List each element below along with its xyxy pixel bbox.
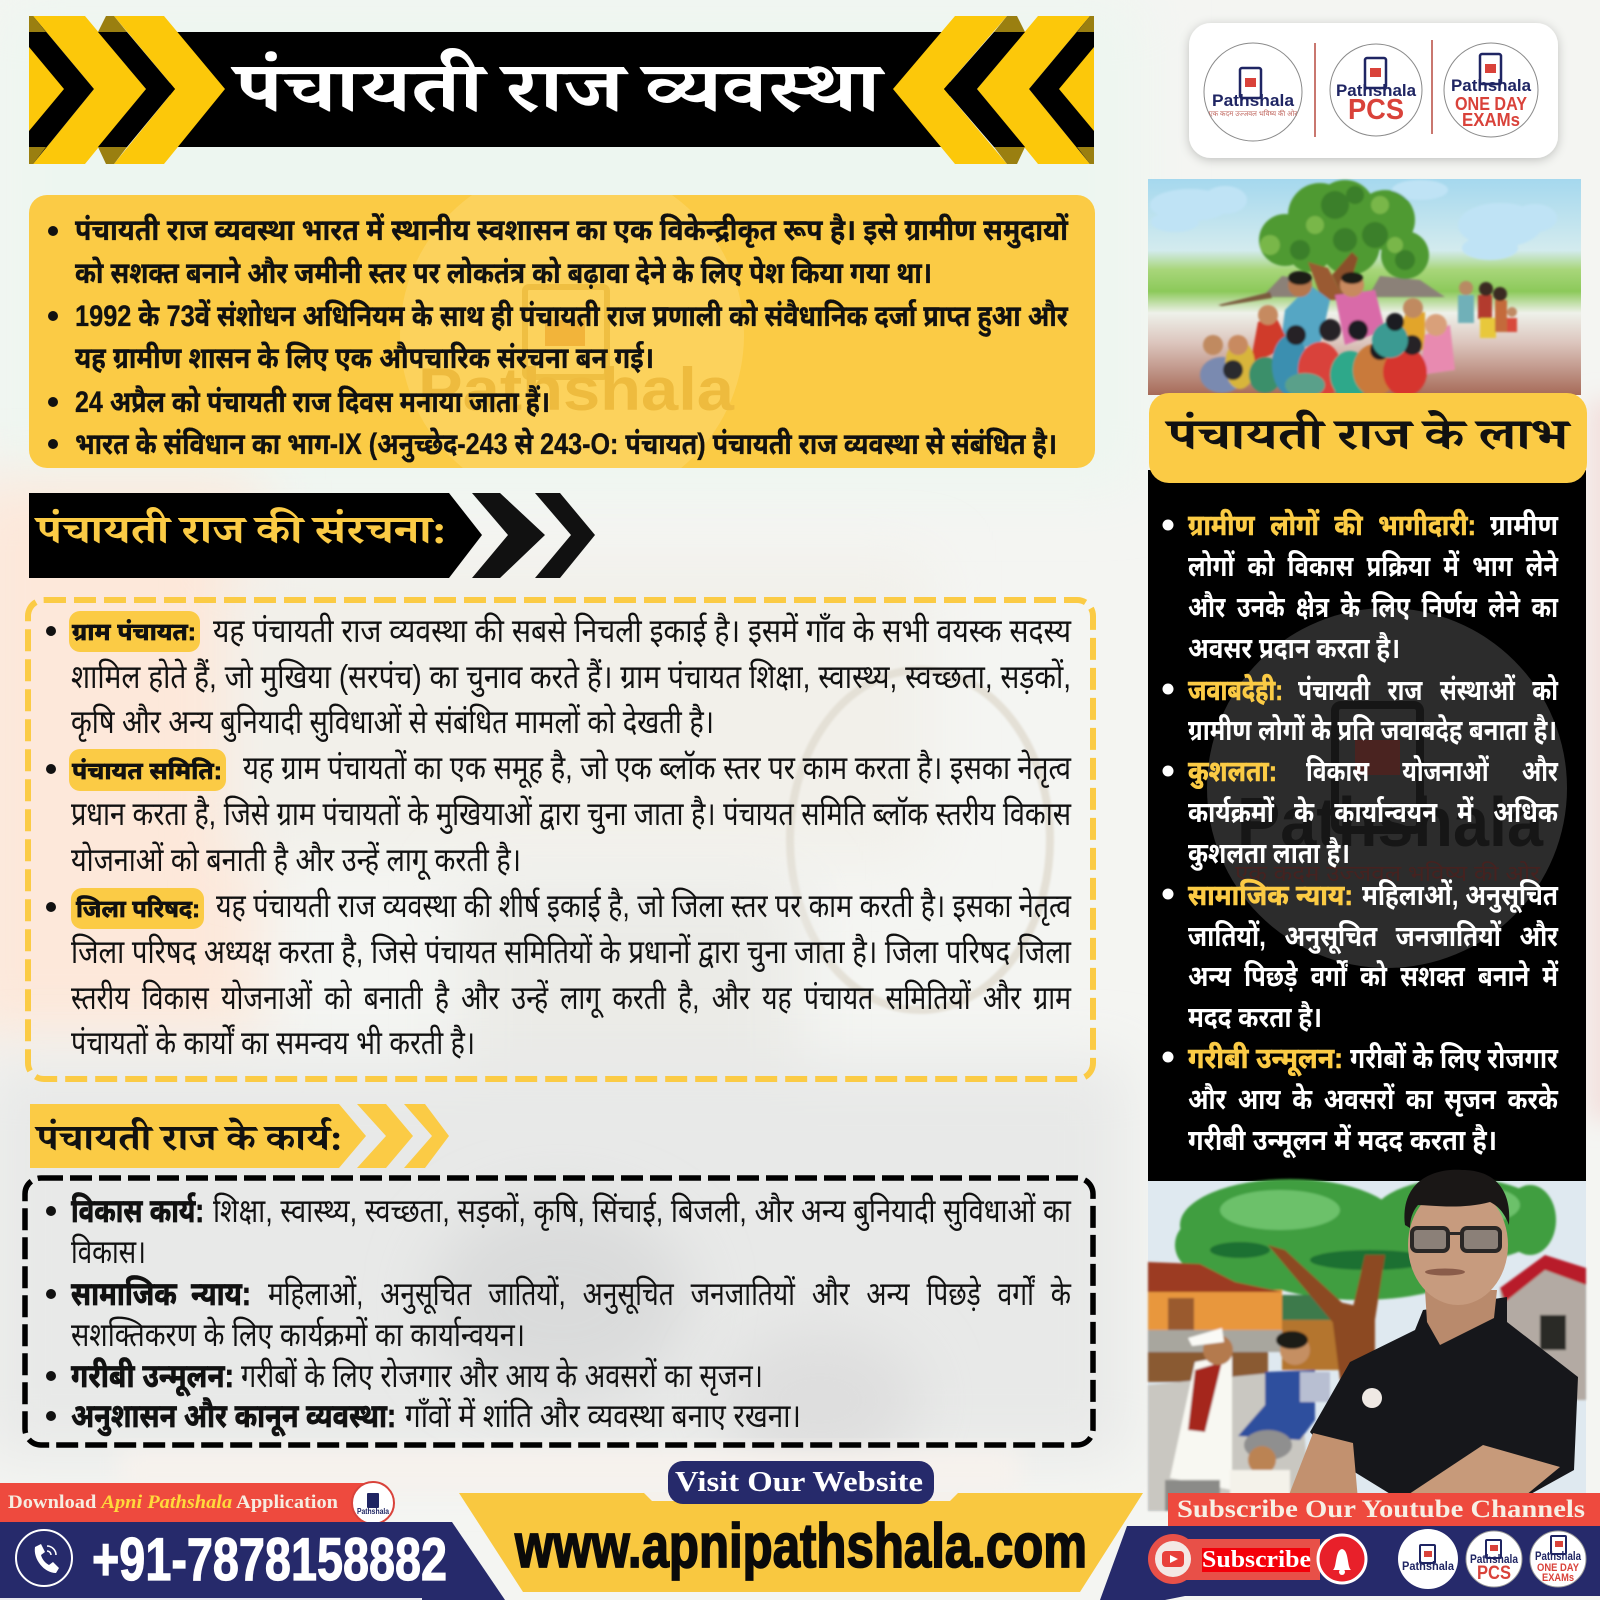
- presenter: [1287, 1170, 1578, 1500]
- chip: gram panchayat: ग्राम पंचायत:: [72, 619, 196, 646]
- benefits bullets: ग्रामीण लोगों की भागीदारी:: [1188, 509, 1476, 542]
- panel: structure: योजनाओं को बनाती है और उन्हें लागू करती है।: [71, 840, 521, 880]
- illustration: village scene with presenter: [1148, 1170, 1586, 1511]
- footer center: website: www.apnipathshala.com: [514, 1512, 1087, 1581]
- panel: structure: कृषि और अन्य बुनियादी सुविधाओं से संबंधित मामलों को देखती है।: [71, 702, 714, 742]
- benefits bullets: जवाबदेही:: [1188, 673, 1283, 707]
- woman in blue sari: [1238, 1331, 1330, 1440]
- website pill: [668, 1461, 934, 1504]
- panel: functions: गरीबी उन्मूलन:: [71, 1357, 234, 1397]
- intro bullets: पंचायती राज व्यवस्था भारत में स्थानीय स्वशासन का एक विकेन्द्रीकृत रूप है। इसे ग्रामीण समुदायों: [75, 212, 1069, 249]
- orange house: [1148, 1262, 1288, 1382]
- intro panel: [29, 195, 1095, 468]
- footer left: app download and phone: Download Apni Pathshala Application: [8, 1492, 338, 1513]
- watermark: [400, 195, 744, 468]
- benefits heading: पंचायती राज के लाभ: [1164, 408, 1571, 459]
- panel: benefits: [1148, 393, 1587, 1181]
- intro bullets: को सशक्त बनाने और जमीनी स्तर पर लोकतंत्र को बढ़ावा देने के लिए पेश किया गया था।: [75, 255, 932, 290]
- heading: structure: [29, 493, 595, 578]
- intro bullets: यह ग्रामीण शासन के लिए एक औपचारिक संरचना बन गई।: [75, 340, 654, 375]
- intro bullets: 1992 के 73वें संशोधन अधिनियम के साथ ही पंचायती राज प्रणाली को संवैधानिक दर्जा प्राप्त हुआ और: [75, 298, 1069, 337]
- panel: functions: गाँवों में शांति और व्यवस्था बनाए रखना।: [405, 1396, 801, 1434]
- panel: functions: शिक्षा, स्वास्थ्य, स्वच्छता, सड़कों, कृषि, सिंचाई, बिजली, और अन्य बुनियादी सुविधाओं का: [213, 1192, 1072, 1231]
- panel: functions: अनुशासन और कानून व्यवस्था:: [71, 1397, 396, 1437]
- logo: One Day Exams: EXAMs: [1462, 110, 1520, 130]
- tree: [1259, 180, 1429, 300]
- logo: PCS small: PCS: [1477, 1563, 1511, 1584]
- intro bullets: [48, 212, 1069, 463]
- ground: [1148, 1370, 1310, 1511]
- icon: phone: [16, 1530, 72, 1586]
- logo: One Day Exams: Pathshala: [1451, 76, 1532, 95]
- panel: structure: शामिल होते हैं, जो मुखिया (सरपंच) का चुनाव करते हैं। ग्राम पंचायत शिक्षा, स्वास्थ्य, स्वच्छता, सड़कों,: [71, 657, 1071, 697]
- watermark: Pathshala: [418, 356, 735, 423]
- logo: PCS: [1330, 44, 1422, 136]
- chip: panchayat samiti: [69, 749, 226, 791]
- heading: functions: [30, 1104, 449, 1168]
- panel: functions: [25, 1178, 1093, 1445]
- logo: PCS small: Pathshala: [1470, 1552, 1518, 1566]
- footer left: app download and phone: +91-7878158882: [92, 1526, 447, 1593]
- logo: small: Pathshala: [357, 1507, 389, 1516]
- clouds: [1150, 180, 1557, 260]
- panel: functions: सशक्तिकरण के लिए कार्यक्रमों का कार्यान्वयन।: [71, 1315, 525, 1353]
- logo: Apni Pathshala: एक कदम उज्जवल भविष्य की ओर: [1209, 109, 1297, 118]
- logo: Pathshala: Pathshala: [1402, 1559, 1454, 1573]
- subscribe button: Subscribe: [1202, 1547, 1311, 1573]
- panel: functions: विकास।: [71, 1233, 146, 1270]
- green wall: [1282, 1295, 1332, 1350]
- standing group: [1458, 281, 1517, 338]
- heading: structure: पंचायती राज की संरचना:: [34, 507, 447, 552]
- benefits bullets: मदद करता है।: [1188, 1001, 1322, 1034]
- logo: Apni Pathshala: Pathshala: [1212, 91, 1295, 110]
- panel: structure: यह ग्राम पंचायतों का एक समूह है, जो एक ब्लॉक स्तर पर काम करता है। इसका नेतृत्व: [243, 748, 1072, 788]
- watermark: एक कदम उज्जवल भविष्य की ओर: [1235, 861, 1541, 886]
- benefits bullets: कुशलता लाता है।: [1188, 837, 1350, 871]
- footer center: website: [459, 1461, 1143, 1592]
- logo: One Day Exams small: [1530, 1531, 1586, 1587]
- seated man: [1230, 1430, 1292, 1511]
- red roof house: [1500, 1255, 1586, 1400]
- benefits bullets: [1162, 509, 1559, 1158]
- chip: zila parishad: जिला परिषद:: [76, 895, 200, 923]
- footer right: youtube: [1100, 1493, 1600, 1600]
- right chevrons: [893, 16, 1094, 164]
- chip: zila parishad: [71, 888, 204, 929]
- title banner: [29, 16, 1094, 164]
- benefits bullets: अवसर प्रदान करता है।: [1188, 632, 1400, 665]
- watermark: [1207, 608, 1567, 968]
- huts: [1262, 276, 1445, 297]
- footer right: youtube: Subscribe Our Youtube Channels: [1177, 1496, 1585, 1523]
- logo: One Day Exams small: Pathshala: [1535, 1549, 1581, 1563]
- logo: One Day Exams small: EXAMs: [1542, 1572, 1574, 1584]
- intro bullets: भारत के संविधान का भाग-IX (अनुच्छेद-243 से 243-O: पंचायत) पंचायती राज व्यवस्था से संबंधित है।: [75, 426, 1057, 463]
- subscribe button: [1148, 1534, 1366, 1584]
- left chevrons: [29, 16, 225, 164]
- logo card: [1189, 23, 1558, 158]
- panel: structure: स्तरीय विकास योजनाओं को बनाती है और उन्हें लागू करती है, और यह पंचायत समितियों और ग्राम: [71, 978, 1072, 1018]
- benefits bullets: ग्रामीण: [1490, 509, 1559, 542]
- panel: structure: यह पंचायती राज व्यवस्था की शीर्ष इकाई है, जो जिला स्तर पर काम करती है। इसका नेतृत्व: [216, 886, 1072, 926]
- man in white kurta: [1165, 1328, 1233, 1511]
- panel: structure: यह पंचायती राज व्यवस्था की सबसे निचली इकाई है। इसमें गाँव के सभी वयस्क सदस्य: [213, 611, 1072, 649]
- logo: PCS: PCS: [1348, 94, 1404, 126]
- logo: One Day Exams: ONE DAY: [1455, 94, 1527, 114]
- benefits heading: [1149, 393, 1587, 483]
- watermark: Pathshala: [1237, 783, 1544, 861]
- panel: functions: महिलाओं, अनुसूचित जातियों, अनुसूचित जनजातियों और अन्य पिछड़े वर्गों के: [268, 1274, 1072, 1314]
- heading: functions: पंचायती राज के कार्य:: [34, 1117, 343, 1159]
- title text: पंचायती राज व्यवस्था: [230, 48, 885, 127]
- panel: structure: जिला परिषद अध्यक्ष करता है, जिसे पंचायत समितियों के प्रधानों द्वारा चुना जाता है। जिला परिषद जिला: [71, 932, 1072, 972]
- benefits bullets: गरीबी उन्मूलन में मदद करता है।: [1188, 1124, 1497, 1158]
- panel: functions: गरीबों के लिए रोजगार और आय के अवसरों का सृजन।: [241, 1356, 763, 1396]
- logo: One Day Exams small: ONE DAY: [1537, 1562, 1580, 1574]
- tree canopy: [1175, 1178, 1556, 1300]
- intro bullets: 24 अप्रैल को पंचायती राज दिवस मनाया जाता हैं।: [75, 384, 550, 419]
- panel: structure: [28, 600, 1093, 1079]
- logo: PCS: Pathshala: [1336, 81, 1417, 100]
- logo: small: [352, 1482, 394, 1524]
- benefits bullets: कुशलता:: [1188, 756, 1277, 789]
- benefits bullets: गरीबों के लिए रोजगार: [1350, 1041, 1559, 1075]
- logo: Apni Pathshala: [1204, 43, 1302, 141]
- logo: One Day Exams: [1444, 43, 1538, 137]
- chip: gram panchayat: [69, 611, 200, 652]
- panel: functions: विकास कार्य:: [71, 1192, 204, 1229]
- panel: structure: प्रधान करता है, जिसे ग्राम पंचायतों के मुखियाओं द्वारा चुना जाता है। पंचायत समिति ब्लॉक स्तरीय विकास: [71, 794, 1072, 834]
- benefits bullets: सामाजिक न्याय:: [1188, 879, 1353, 912]
- footer left: app download and phone: [0, 1482, 505, 1600]
- chip: panchayat samiti: पंचायत समिति:: [72, 757, 222, 785]
- website pill: Visit Our Website: [675, 1467, 923, 1498]
- logo: Pathshala: [1398, 1529, 1458, 1589]
- crowd: [1200, 271, 1455, 399]
- panel: functions: सामाजिक न्याय:: [71, 1275, 251, 1312]
- logo: PCS small: [1466, 1531, 1522, 1587]
- trunk: [1330, 1300, 1375, 1380]
- benefits bullets: महिलाओं, अनुसूचित: [1362, 879, 1559, 913]
- illustration: village meeting under tree: [1148, 179, 1581, 399]
- benefits bullets: गरीबी उन्मूलन:: [1188, 1042, 1343, 1076]
- panel: structure: पंचायतों के कार्यों का समन्वय भी करती है।: [71, 1023, 475, 1061]
